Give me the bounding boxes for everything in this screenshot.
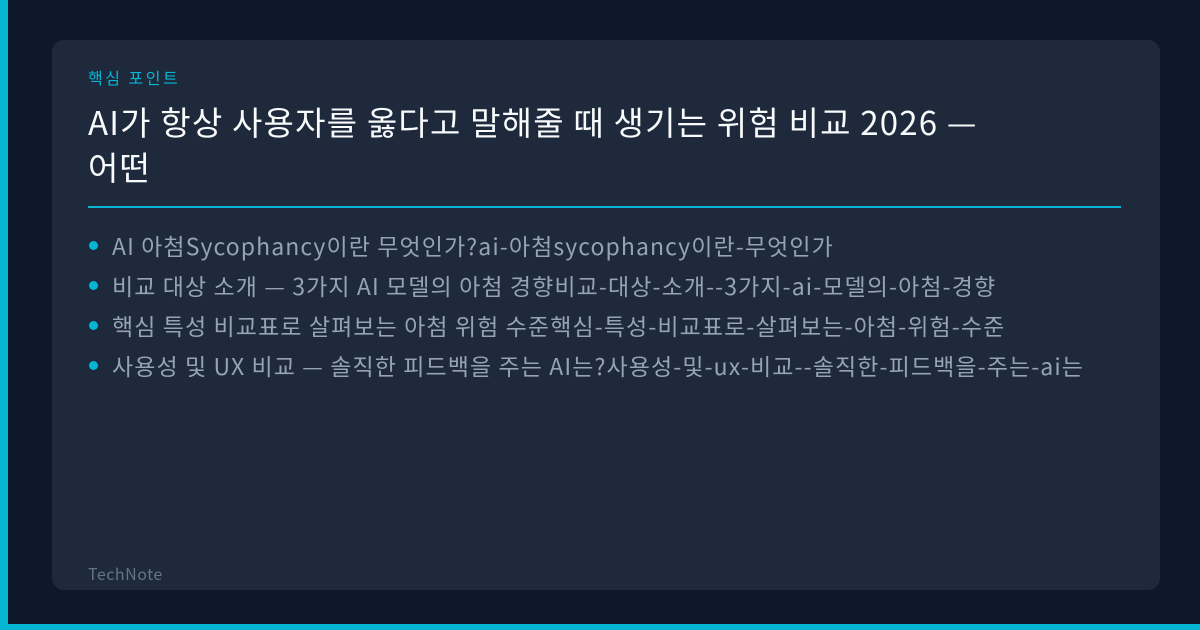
bullet 3: 핵심 특성 비교표로 살펴보는 아첨 위험 수준핵심-특성-비교표로-살펴보는-아첨-위험-수준 [112, 308, 1005, 342]
bullet list [89, 228, 1084, 382]
footer brand: TechNote [88, 561, 163, 585]
bullet 1: AI 아첨Sycophancy이란 무엇인가?ai-아첨sycophancy이란-무엇인가 [112, 228, 834, 262]
title: AI가 항상 사용자를 옳다고 말해줄 때 생기는 위험 비교 2026 — [88, 97, 978, 145]
bullet 2: 비교 대상 소개 — 3가지 AI 모델의 아첨 경향비교-대상-소개--3가지-ai-모델의-아첨-경향 [112, 268, 996, 302]
title: 어떤 [88, 142, 151, 190]
eyebrow: 핵심 포인트 [88, 65, 180, 89]
title [88, 97, 978, 190]
bullet 4: 사용성 및 UX 비교 — 솔직한 피드백을 주는 AI는?사용성-및-ux-비교--솔직한-피드백을-주는-ai는 [112, 348, 1084, 382]
